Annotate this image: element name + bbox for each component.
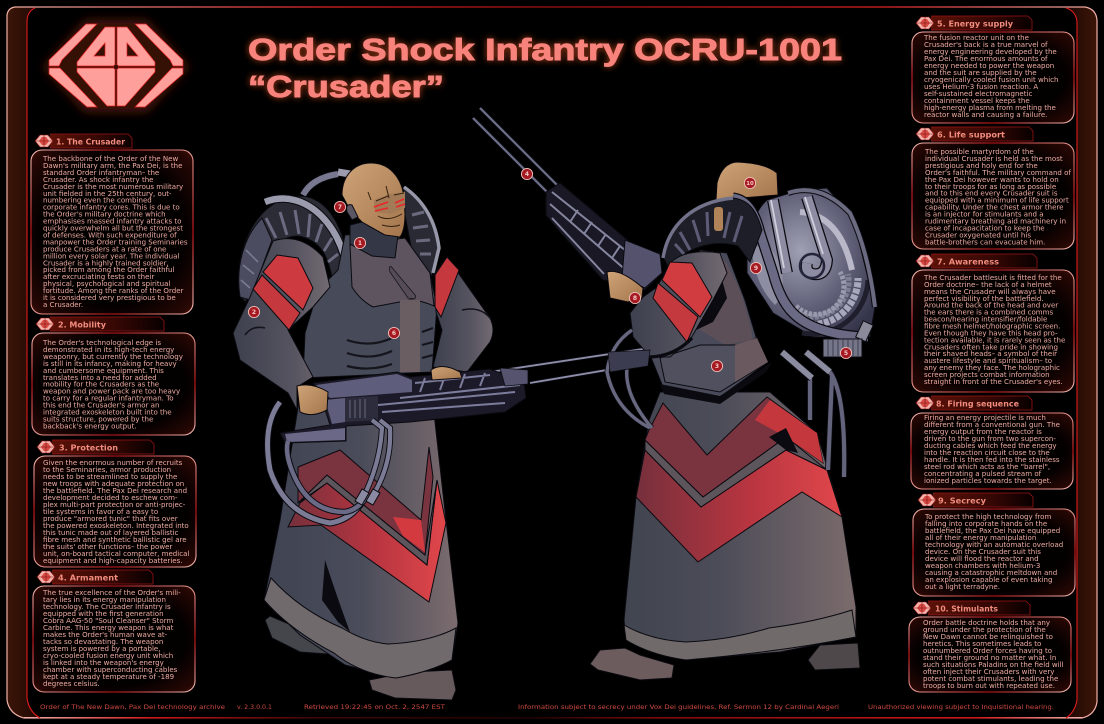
panel: 3. Protection: tile systems in favor of a easy to xyxy=(43,507,158,516)
panel: 4. Armament: Carbine. This energy weapon is what xyxy=(43,623,174,632)
panel: 7. Awareness: Crusaders often take pride in showing xyxy=(924,342,1058,351)
footer xyxy=(40,703,1054,711)
panel: 1. The Crusader: the Order's military doctrine which xyxy=(43,210,166,219)
panel: 7. Awareness: perfect visibility of the battlefield. xyxy=(924,294,1044,303)
panel: 6. Life support: battle-brothers can evacuate him. xyxy=(925,237,1045,246)
panel: 10. Stimulants: often inject their Crusaders with very xyxy=(923,667,1054,676)
panel: 8. Firing sequence: ionized particles towards the target. xyxy=(924,476,1052,485)
panel: 1. The Crusader xyxy=(31,134,193,314)
logo xyxy=(43,20,189,112)
panel: 10. Stimulants: ground under the protection of the xyxy=(923,625,1046,634)
panel: 8. Firing sequence xyxy=(911,396,1073,489)
panel: 7. Awareness: means the Crusader will always have xyxy=(924,287,1056,296)
callout markers: 9 xyxy=(754,265,758,272)
panel: 4. Armament: chamber with superconducting cables xyxy=(43,665,178,674)
panel: 5. Energy supply: energy engineering developed by the xyxy=(924,47,1057,56)
arm xyxy=(630,252,727,357)
torso xyxy=(650,250,767,397)
footer: Information subject to secrecy under Vox Dei guidelines, Ref. Sermon 12 by Cardinal Aegeri xyxy=(518,703,839,711)
panel: 7. Awareness: any enemy they face. The holographic xyxy=(924,363,1060,372)
panel: 4. Armament: is linked into the weapon's energy xyxy=(43,658,164,667)
panel: 6. Life support: case of incapacitation to keep the xyxy=(925,223,1045,232)
panel: 1. The Crusader: quickly overwhelm all but the strongest xyxy=(43,224,183,232)
panel: 3. Protection: needs to be streamlined to supply the xyxy=(43,472,177,481)
panel: 5. Energy supply: cryogenically cooled fusion unit which xyxy=(924,75,1059,84)
pack frame xyxy=(239,196,351,302)
panel: 3. Protection: produce "armored tunic" that fits over xyxy=(43,514,178,523)
panel: 6. Life support: Order's faithful. The military command of xyxy=(925,168,1071,177)
panel: 1. The Crusader: picked from among the Order faithful xyxy=(43,265,174,274)
panel: 3. Protection: this tunic made out of layered ballistic xyxy=(43,528,179,537)
rifle xyxy=(473,108,662,290)
panel: 6. Life support: is an injector for stimulants and a xyxy=(925,210,1044,219)
panel: 7. Awareness: tection available, it is rarely seen as the xyxy=(924,335,1065,344)
frame strap xyxy=(733,198,868,337)
footer: Retrieved 19:22:45 on Oct. 2, 2547 EST xyxy=(304,703,445,711)
panel: 9. Secrecy: device will flood the reactor and xyxy=(925,554,1039,563)
panel: 7. Awareness: fibre mesh helmet/holographic screen. xyxy=(924,322,1060,331)
panel: 3. Protection: the suits' other functions– the power xyxy=(43,542,172,551)
panel: 1. The Crusader: unit fielded in the 25th century, out- xyxy=(43,189,172,198)
callout markers: 5 xyxy=(844,350,848,357)
panel: 3. Protection: equipment and high-capacity batteries. xyxy=(43,556,183,565)
panel: 8. Firing sequence: Firing an energy projectile is much xyxy=(924,413,1046,422)
panel: 6. Life support: the Pax Dei however wants to hold on xyxy=(925,175,1059,184)
callout markers xyxy=(248,168,852,372)
panel: 6. Life support: to their troops for as long as possible xyxy=(925,182,1056,191)
panel: 8. Firing sequence: handle. It is then fed into the stainless xyxy=(924,455,1060,464)
panel: 1. The Crusader: corporate infantry cores. This is due to xyxy=(43,203,180,212)
panel: 2. Mobility xyxy=(32,317,195,435)
panel: 9. Secrecy: device. On the Crusader suit this xyxy=(925,547,1041,556)
panel: 3. Protection: plex multi-part protection or anti-projec- xyxy=(43,500,186,509)
callout markers: 10 xyxy=(746,181,754,187)
callout markers: 7 xyxy=(338,204,342,211)
panel: 8. Firing sequence: into the reaction circuit close to the xyxy=(924,448,1050,457)
panel: 2. Mobility: 2. Mobility xyxy=(58,320,107,330)
panel: 3. Protection: Given the enormous number of recruits xyxy=(43,458,183,467)
panel: 10. Stimulants: stand their ground no matter what. In xyxy=(923,653,1056,662)
panel: 1. The Crusader: produce Crusaders at a rate of one xyxy=(43,244,166,253)
panel: 10. Stimulants: 10. Stimulants xyxy=(935,604,998,614)
panel: 2. Mobility: mobility for the Crusaders as the xyxy=(43,380,159,389)
panel: 8. Firing sequence: energy output from the reactor is xyxy=(924,427,1042,436)
panel: 7. Awareness: 7. Awareness xyxy=(937,256,999,266)
panel: 5. Energy supply: The fusion reactor unit on the xyxy=(923,33,1029,42)
panel: 3. Protection: fibre mesh and synthetic ballistic gel are xyxy=(43,535,187,544)
panel: 2. Mobility: is still in its infancy, making for heavy xyxy=(43,359,177,368)
panel: 6. Life support: 6. Life support xyxy=(937,130,1005,140)
head xyxy=(342,163,405,237)
panel: 5. Energy supply: 5. Energy supply xyxy=(937,18,1014,28)
panel: 6. Life support: rudimentary breathing aid machinery in xyxy=(925,216,1066,226)
panel: 4. Armament: cryo-cooled fusion energy unit which xyxy=(43,651,173,660)
panel: 7. Awareness: Around the back of the head and over xyxy=(924,301,1058,310)
panel: 4. Armament: kept at a steady temperature of -189 xyxy=(43,672,174,681)
near arm xyxy=(233,239,330,410)
panel: 1. The Crusader: after excruciating tests on their xyxy=(43,272,154,281)
panel: 7. Awareness: beacon/hearing intensifier/foldable xyxy=(924,315,1047,324)
panel: 7. Awareness xyxy=(912,254,1074,392)
title xyxy=(248,33,842,104)
callout markers: 4 xyxy=(525,171,529,178)
cables xyxy=(268,402,362,523)
panel: 10. Stimulants: Order battle doctrine holds that any xyxy=(923,618,1050,627)
panel: 1. The Crusader: a Crusader. xyxy=(43,300,83,309)
panel: 3. Protection: the powered exoskeleton. Integrated into xyxy=(43,521,189,530)
pack arch xyxy=(663,198,762,266)
title: “Crusader” xyxy=(248,70,444,104)
panel: 9. Secrecy: causing a catastrophic meltdown and xyxy=(925,568,1057,577)
panel: 3. Protection: to the Seminaries, armor production xyxy=(43,465,171,474)
panel: 9. Secrecy: 9. Secrecy xyxy=(938,496,987,506)
panel: 8. Firing sequence: driven to the gun from two supercon- xyxy=(924,434,1056,443)
boots xyxy=(590,648,674,680)
panel: 4. Armament xyxy=(33,570,195,692)
panel: 1. The Crusader: manpower the Order training Seminaries xyxy=(43,237,188,246)
footer: Unauthorized viewing subject to Inquisitional hearing. xyxy=(868,703,1054,711)
panel: 8. Firing sequence: 8. Firing sequence xyxy=(936,398,1019,408)
title: “Crusader” xyxy=(248,70,444,104)
callout markers: 8 xyxy=(633,295,637,302)
panel: 8. Firing sequence: steel rod which acts as the "barrel", xyxy=(924,462,1050,471)
shadow fold xyxy=(322,560,350,632)
panel: 5. Energy supply: energy needed to power the weapon xyxy=(924,61,1054,70)
panel: 1. The Crusader: Crusader is a highly trained soldier, xyxy=(43,258,169,267)
callout markers: 1 xyxy=(358,240,362,247)
panel: 10. Stimulants: heretics. This sometimes leads to xyxy=(923,639,1041,648)
callout markers: 2 xyxy=(252,309,256,316)
panel: 10. Stimulants: outnumbered Order forces having to xyxy=(923,646,1052,655)
panel: 1. The Crusader: standard Order infantryman– the xyxy=(43,168,159,177)
heat sink and connectors xyxy=(823,339,862,357)
gun xyxy=(280,348,650,443)
panel: 4. Armament: makes the Order's human wave at- xyxy=(43,630,168,639)
panel: 7. Awareness: straight in front of the Crusader's eyes. xyxy=(924,377,1063,386)
panel: 4. Armament: technology. The Crusader Infantry is xyxy=(43,602,171,611)
panel: 5. Energy supply: reactor walls and causing a failure. xyxy=(924,110,1047,119)
panel: 9. Secrecy: an explosion capable of even taking xyxy=(925,575,1052,584)
hands xyxy=(297,385,328,415)
panel: 3. Protection: 3. Protection xyxy=(59,442,118,452)
panel: 4. Armament: equipped with the first generation xyxy=(43,609,164,618)
panel: 4. Armament: Cobra AAG-50 "Soul Cleanser" Storm xyxy=(43,616,173,625)
panel: 10. Stimulants xyxy=(909,601,1071,692)
pack body xyxy=(747,188,875,337)
panel: 4. Armament: degrees celsius. xyxy=(43,679,100,688)
panel: 10. Stimulants: such situations Paladins on the field will xyxy=(923,660,1064,669)
panel: 4. Armament: The true excellence of the Order's mili- xyxy=(42,588,181,597)
panel: 5. Energy supply: self-sustained electromagnetic xyxy=(924,89,1032,98)
panel: 9. Secrecy: To protect the high technology from xyxy=(924,512,1051,521)
panel: 2. Mobility: The Order's technological edge is xyxy=(42,338,161,347)
footer: v. 2.3.0.0.1 xyxy=(237,703,272,711)
red chevrons xyxy=(636,450,842,562)
panel: 3. Protection: the battlefield. The Pax Dei research and xyxy=(43,486,187,495)
panel: 3. Protection: new troops with adequate protection on xyxy=(43,479,184,488)
panel: 2. Mobility: translates into a need for added xyxy=(43,373,157,382)
torso xyxy=(303,232,437,378)
panel: 5. Energy supply: containment vessel keeps the xyxy=(924,96,1030,105)
boots xyxy=(265,616,327,654)
backpack tubes behind head xyxy=(303,174,338,195)
panel: 2. Mobility: integrated exoskeleton built into the xyxy=(43,408,172,416)
panel: 7. Awareness: The Crusader battlesuit is fitted for the xyxy=(923,273,1062,282)
panel: 5. Energy supply: Crusader's back is a true marvel of xyxy=(924,40,1048,49)
panel: 7. Awareness: Even though they have this head pro- xyxy=(924,328,1058,337)
panel: 5. Energy supply: Pax Dei. The enormous amounts of xyxy=(924,54,1048,63)
panel: 6. Life support: capability. Under the chest armor there xyxy=(925,203,1064,212)
panel: 9. Secrecy: out a light terradyne. xyxy=(925,582,1000,591)
title: Order Shock Infantry OCRU-1001 xyxy=(248,33,842,67)
panel: 2. Mobility: weaponry, but currently the technology xyxy=(43,352,183,361)
panel: 4. Armament: tary lies in its energy manipulation xyxy=(43,595,166,604)
panel: 4. Armament: system is powered by a portable, xyxy=(43,644,160,653)
panel: 2. Mobility: suits structure, powered by the xyxy=(43,414,153,423)
robe xyxy=(624,392,856,660)
panel: 5. Energy supply xyxy=(912,16,1074,123)
panel: 8. Firing sequence: different from a conventional gun. The xyxy=(924,420,1060,429)
panel: 7. Awareness: their shaved heads– a symbol of their xyxy=(924,349,1057,358)
figure: crusader rear view xyxy=(473,108,875,680)
panel: 6. Life support: Crusader oxygenated until his xyxy=(925,230,1031,239)
panel: 7. Awareness: Order doctrine– the lack of a helmet xyxy=(924,280,1052,289)
panel: 3. Protection xyxy=(34,440,196,567)
figure: crusader front view xyxy=(233,163,650,700)
panel: 4. Armament: 4. Armament xyxy=(58,572,118,582)
panel: 9. Secrecy: technology with an automatic overload xyxy=(925,540,1063,549)
panel: 6. Life support: prestigious and holy end for the xyxy=(925,161,1038,170)
panel: 6. Life support: individual Crusader is held as the most xyxy=(925,154,1063,163)
panel: 1. The Crusader: it is considered very prestigious to be xyxy=(43,293,176,302)
panel: 9. Secrecy: weapon chambers with helium-3 xyxy=(925,561,1040,570)
cables xyxy=(607,330,652,428)
panel: 6. Life support: and to this end every Crusader suit is xyxy=(925,189,1058,198)
panel: 1. The Crusader: Crusader. As shock infantry the xyxy=(43,175,154,184)
panel: 1. The Crusader: 1. The Crusader xyxy=(56,136,126,146)
panel: 10. Stimulants: troops to burn out with repeated use. xyxy=(923,681,1055,690)
collar xyxy=(350,222,398,258)
panel: 8. Firing sequence: concentrating a pulsed stream of xyxy=(924,469,1042,478)
head xyxy=(716,162,778,200)
panel: 1. The Crusader: physical, psychological and spiritual xyxy=(43,279,170,288)
hand xyxy=(607,271,643,302)
panel: 2. Mobility: backback's energy output. xyxy=(43,421,137,430)
panel: 2. Mobility: and cumbersome equipment. This xyxy=(43,366,164,375)
panel: 5. Energy supply: and the suit are supplied by the xyxy=(924,68,1037,77)
callout markers: 6 xyxy=(392,330,396,337)
panel: 9. Secrecy: all of their energy manipulation xyxy=(925,533,1036,542)
panel: 1. The Crusader: of defenses. With such expenditure of xyxy=(43,230,177,239)
panel: 7. Awareness: screen projects combat information xyxy=(924,370,1050,379)
title: Order Shock Infantry OCRU-1001 xyxy=(248,33,842,67)
panel: 1. The Crusader: Dawn's military arm, the Pax Dei, is the xyxy=(43,161,182,170)
panel: 1. The Crusader: fortitude. Among the ranks of the Order xyxy=(43,286,184,295)
panel: 1. The Crusader: numbering even the combined xyxy=(43,196,152,205)
panel: 6. Life support: equipped with a minimum of life support xyxy=(925,196,1069,205)
panel: 4. Armament: tacks so devastating. The weapon xyxy=(43,637,163,646)
panel: 2. Mobility: weapon and power pack are too heavy xyxy=(43,387,180,396)
panel: 6. Life support: The possible martyrdom of the xyxy=(924,147,1034,156)
panel: 3. Protection: development decided to eschew com- xyxy=(43,493,178,502)
panel: 2. Mobility: demonstrated in its high-tech energy xyxy=(43,345,174,354)
panel: 2. Mobility: to carry for a regular infantryman. To xyxy=(43,394,174,403)
robe xyxy=(264,395,458,678)
panel: 9. Secrecy xyxy=(913,493,1075,596)
panel: 1. The Crusader: million every solar year. The individual xyxy=(43,251,179,260)
panel: 10. Stimulants: potent combat stimulants, leading the xyxy=(923,674,1058,683)
far shoulder ring xyxy=(403,186,438,276)
panel: 7. Awareness: austere lifestyle and spiritualism– to xyxy=(924,356,1052,365)
panel: 9. Secrecy: falling into corporate hands on the xyxy=(925,519,1047,528)
panel: 10. Stimulants: New Dawn cannot be relinquished to xyxy=(923,632,1053,641)
panel: 3. Protection: unit, on-board tactical computer, medical xyxy=(43,549,189,558)
panel: 1. The Crusader: The backbone of the Order of the New xyxy=(42,154,178,163)
coolant tubes xyxy=(773,197,827,274)
panel: 7. Awareness: the ears there is a combined comms xyxy=(924,308,1053,317)
far arm xyxy=(433,257,493,372)
panel: 8. Firing sequence: ducting cables which feed the energy xyxy=(924,441,1057,450)
panel: 1. The Crusader: Crusader is the most numerous military xyxy=(43,182,183,191)
panel: 9. Secrecy: battlefield, the Pax Dei have equipped xyxy=(925,526,1060,535)
panel: 5. Energy supply: uses Helium-3 fusion reaction. A xyxy=(924,82,1038,91)
panel: 1. The Crusader: emphasises massed infantry attacks to xyxy=(43,217,181,226)
footer: Order of The New Dawn, Pax Dei technology archive xyxy=(40,703,225,711)
panel: 2. Mobility: this end the Crusader's armor an xyxy=(43,401,159,410)
panel: 5. Energy supply: high-energy plasma from melting the xyxy=(924,103,1056,112)
callout markers: 3 xyxy=(715,363,719,370)
panel: 6. Life support xyxy=(912,127,1074,249)
red chevrons xyxy=(288,480,446,602)
